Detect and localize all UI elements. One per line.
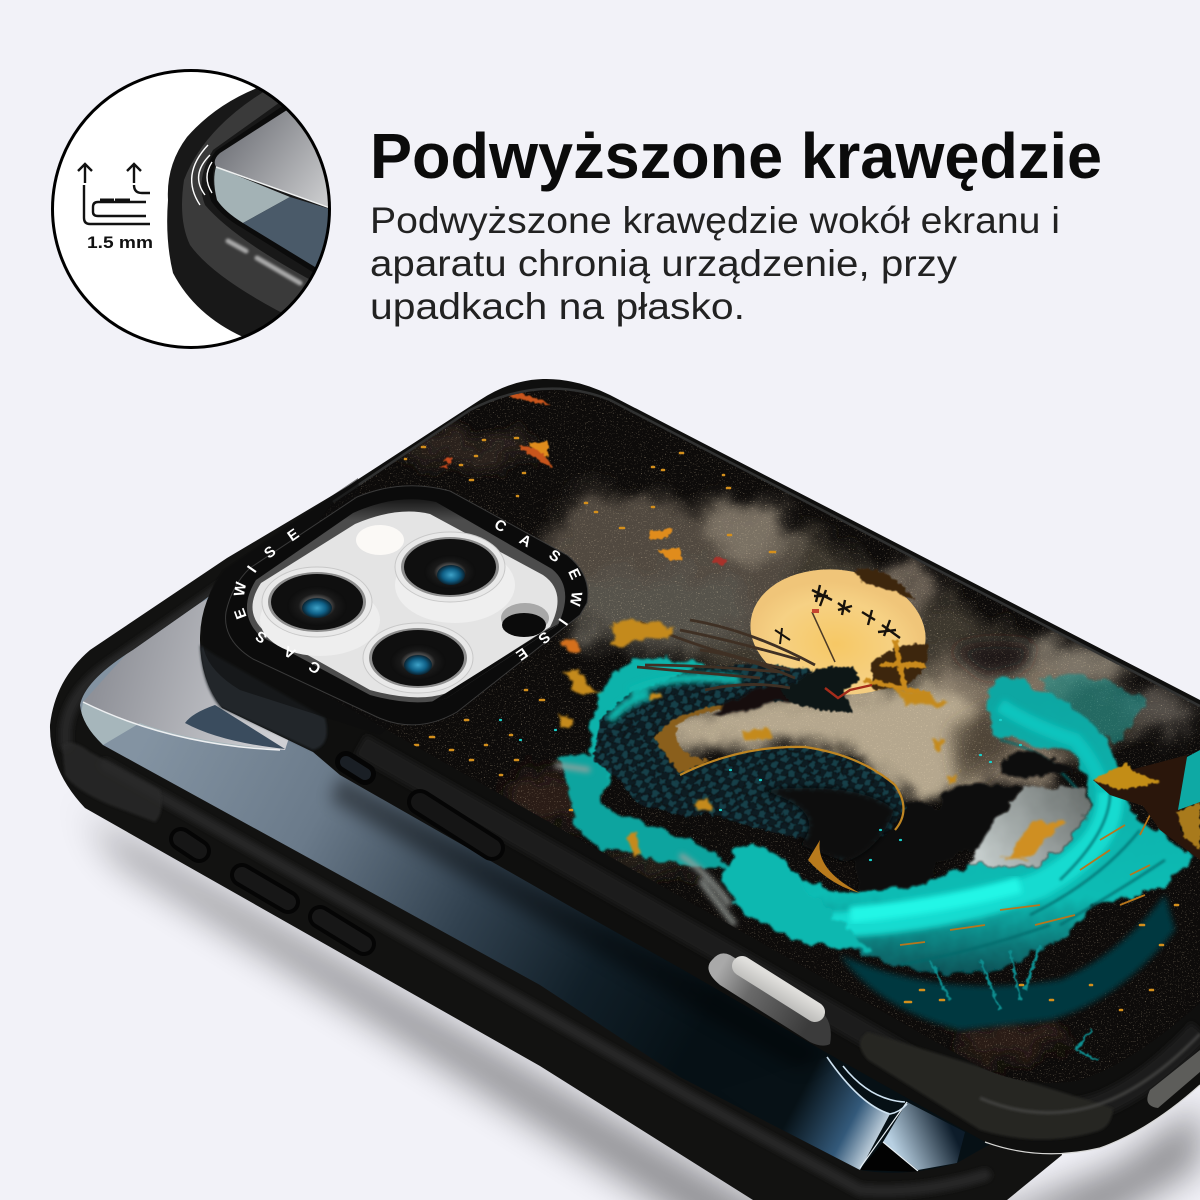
- camera inner bevel: [247, 499, 565, 702]
- teal right edge splash: [1178, 750, 1200, 810]
- bottom lens: [363, 623, 473, 693]
- circle fill: [53, 71, 329, 347]
- left lens: [262, 567, 372, 637]
- top lens: [395, 532, 505, 602]
- CASEWISE lettering: E: [231, 606, 250, 621]
- dragon artwork: [200, 370, 1200, 1110]
- grey screen: [215, 105, 330, 208]
- circle outline: [52, 70, 330, 348]
- front phone translucent corner: [200, 645, 327, 750]
- body text: upadkach na płasko.: [370, 286, 745, 327]
- CASEWISE lettering: I: [244, 563, 260, 576]
- dragon body: [593, 664, 907, 860]
- CASEWISE lettering: S: [546, 546, 564, 566]
- shadow beneath phones: [60, 780, 1200, 1200]
- foam: [970, 787, 1090, 867]
- dragon back outline: [680, 747, 904, 830]
- back phone translucent corner: [62, 743, 162, 822]
- metal port button: [708, 953, 831, 1046]
- blue glow wedge: [786, 1058, 890, 1170]
- front phone body: [200, 379, 1200, 1154]
- camera window: [252, 512, 558, 697]
- CASEWISE lettering: A: [516, 531, 534, 551]
- moon calligraphy: [775, 585, 900, 644]
- front phone case: [200, 370, 1200, 1154]
- dragon dark underside: [760, 788, 895, 862]
- camera module: [203, 478, 588, 735]
- dragon head: [780, 667, 860, 713]
- CASEWISE lettering: E: [284, 525, 302, 545]
- white arcs: [192, 145, 212, 205]
- wave orange streaks: [900, 815, 1150, 945]
- gold patches: [558, 619, 960, 857]
- title: Podwyższone krawędzie: [370, 120, 1102, 192]
- dark smudge near moon: [950, 700, 1020, 790]
- upper flecks: [438, 392, 728, 566]
- neck teal highlight: [610, 678, 740, 720]
- back phone body: [50, 476, 1062, 1200]
- dragon mouth: [825, 685, 872, 698]
- wave dark streaks: [900, 740, 1165, 965]
- CASEWISE lettering: A: [281, 642, 299, 662]
- CASEWISE lettering: S: [261, 543, 279, 562]
- CASEWISE lettering: I: [555, 615, 571, 628]
- teal dots: [500, 720, 1021, 860]
- body text: [370, 200, 1060, 327]
- CASEWISE lettering: W: [231, 580, 250, 598]
- rim highlights: [228, 241, 300, 283]
- back phone rim highlight: [65, 585, 985, 1191]
- wave root lines: [930, 945, 1098, 1060]
- body text: Podwyższone krawędzie wokół ekranu i: [370, 200, 1060, 241]
- black rocks: [850, 752, 1075, 893]
- camera case surround: [203, 478, 420, 735]
- art top edge rim: [333, 389, 1200, 706]
- upper teal spray: [1040, 677, 1150, 745]
- inner black lip: [210, 108, 315, 270]
- front phone cast shadow: [330, 775, 827, 1070]
- foam gold: [1000, 820, 1062, 860]
- zoomed phone corner: [167, 60, 340, 340]
- camera black ring: [226, 486, 588, 725]
- CASEWISE lettering: C: [491, 516, 509, 536]
- dragon mane: [637, 620, 815, 690]
- speckle layer: [200, 370, 1200, 1110]
- dragon tail crescent: [808, 840, 860, 893]
- beige cloud: [665, 682, 977, 800]
- lens plateau shadow: [395, 547, 515, 623]
- back phone case: [50, 476, 1100, 1200]
- right wave: [730, 679, 1193, 1060]
- dragon mane lower tuft: [710, 686, 792, 718]
- grey screen reflection: [84, 599, 288, 750]
- wave body: [730, 679, 1193, 973]
- dark blue curve: [185, 705, 285, 749]
- front phone rim band: [360, 745, 1200, 1114]
- body text: aparatu chronią urządzenie, przy: [370, 243, 958, 284]
- black triangle: [860, 1142, 918, 1172]
- CASEWISE lettering: E: [513, 644, 531, 664]
- spray white: [555, 765, 735, 925]
- CASEWISE lettering: W: [566, 590, 585, 608]
- bottom brown stains: [510, 770, 1070, 1060]
- front phone bottom white edge: [985, 1085, 1200, 1154]
- dark screen: [243, 197, 330, 285]
- CASEWISE lettering: C: [306, 657, 324, 677]
- wave deep teal: [840, 895, 1175, 1030]
- CASEWISE lettering: [231, 516, 585, 677]
- flash: [356, 525, 404, 555]
- front phone bottom right speaker: [1147, 1050, 1200, 1108]
- dragon gold belly crescent: [654, 704, 724, 774]
- front phone side buttons: [346, 762, 492, 848]
- back phone screen: [80, 596, 990, 1172]
- translucent rim: [182, 85, 320, 322]
- gold rock: [1093, 755, 1200, 860]
- black ring lower right overlay: [430, 622, 562, 703]
- microphone hole: [501, 603, 549, 637]
- case corner: [167, 60, 340, 340]
- gold dots: [405, 438, 1178, 1010]
- back phone side buttons: [181, 839, 364, 944]
- zoom circle: raised edge detail: [52, 60, 340, 348]
- dragon left teal waves: [558, 658, 870, 950]
- icon label: 1.5 mm: [87, 234, 153, 252]
- CASEWISE lettering: S: [252, 627, 270, 647]
- moon smudges: [855, 569, 928, 690]
- moon: [750, 568, 931, 695]
- front phone lower-right translucent corner: [860, 1032, 1113, 1140]
- dust clouds: [405, 432, 1200, 800]
- CASEWISE lettering: E: [564, 566, 584, 582]
- icon: raised edge diagram: [78, 164, 150, 224]
- CASEWISE lettering: S: [535, 628, 553, 647]
- screen highlight line: [216, 167, 330, 208]
- pale glass wedge: [81, 703, 272, 749]
- pale glass: [214, 167, 290, 223]
- wave bright core: [830, 790, 1110, 925]
